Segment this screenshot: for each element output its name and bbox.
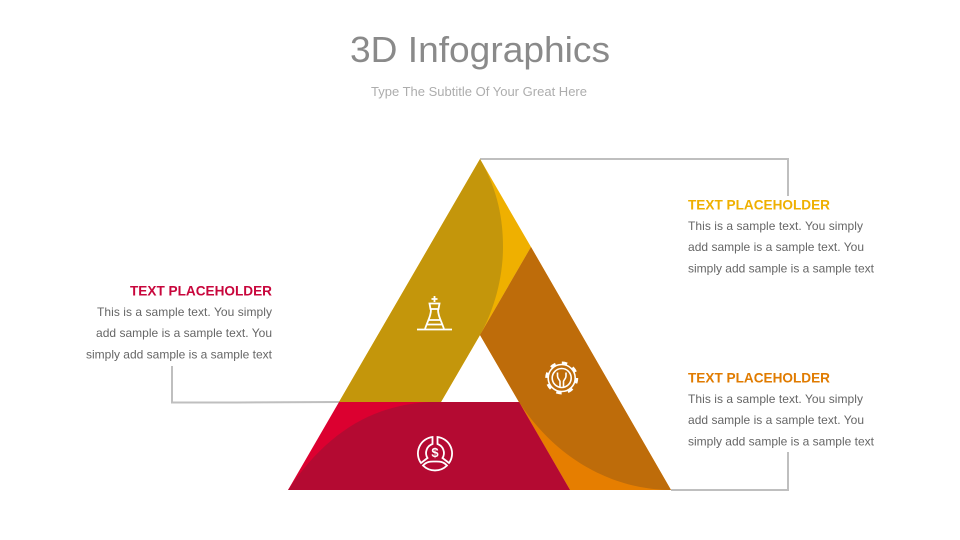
text block: left: TEXT PLACEHOLDER bbox=[130, 282, 272, 298]
text block: bottom right: add sample is a sample text. You bbox=[688, 413, 864, 427]
connector: bottom right bbox=[671, 452, 788, 490]
text block: bottom right: TEXT PLACEHOLDER bbox=[688, 370, 830, 386]
panel: gold band bbox=[339, 159, 531, 402]
icon: chess king bbox=[417, 296, 452, 330]
text block: top right: TEXT PLACEHOLDER bbox=[688, 196, 830, 212]
connector: top right bbox=[480, 159, 788, 196]
title: 3D Infographics bbox=[350, 29, 610, 70]
text block: top right bbox=[688, 196, 875, 276]
text block: top right: This is a sample text. You simply bbox=[688, 219, 863, 233]
panel: orange band bbox=[480, 247, 671, 490]
subtitle: Type The Subtitle Of Your Great Here bbox=[371, 84, 587, 99]
text block: top right: add sample is a sample text. You bbox=[688, 240, 864, 254]
icon: dollar segmented circle: $ bbox=[431, 445, 439, 460]
text block: left: This is a sample text. You simply bbox=[97, 305, 272, 319]
text block: bottom right: simply add sample is a sample text bbox=[688, 434, 875, 448]
text block: bottom right: This is a sample text. You simply bbox=[688, 392, 863, 406]
text block: left: add sample is a sample text. You bbox=[96, 326, 272, 340]
text block: bottom right bbox=[688, 370, 875, 448]
icon: gear with wrench bbox=[546, 363, 577, 393]
text block: left bbox=[86, 282, 273, 362]
panel: red band bbox=[288, 402, 570, 490]
text block: left: simply add sample is a sample text bbox=[86, 348, 273, 362]
connector: left bbox=[172, 366, 340, 402]
icon: dollar segmented circle bbox=[418, 437, 452, 470]
text block: top right: simply add sample is a sample text bbox=[688, 262, 875, 276]
